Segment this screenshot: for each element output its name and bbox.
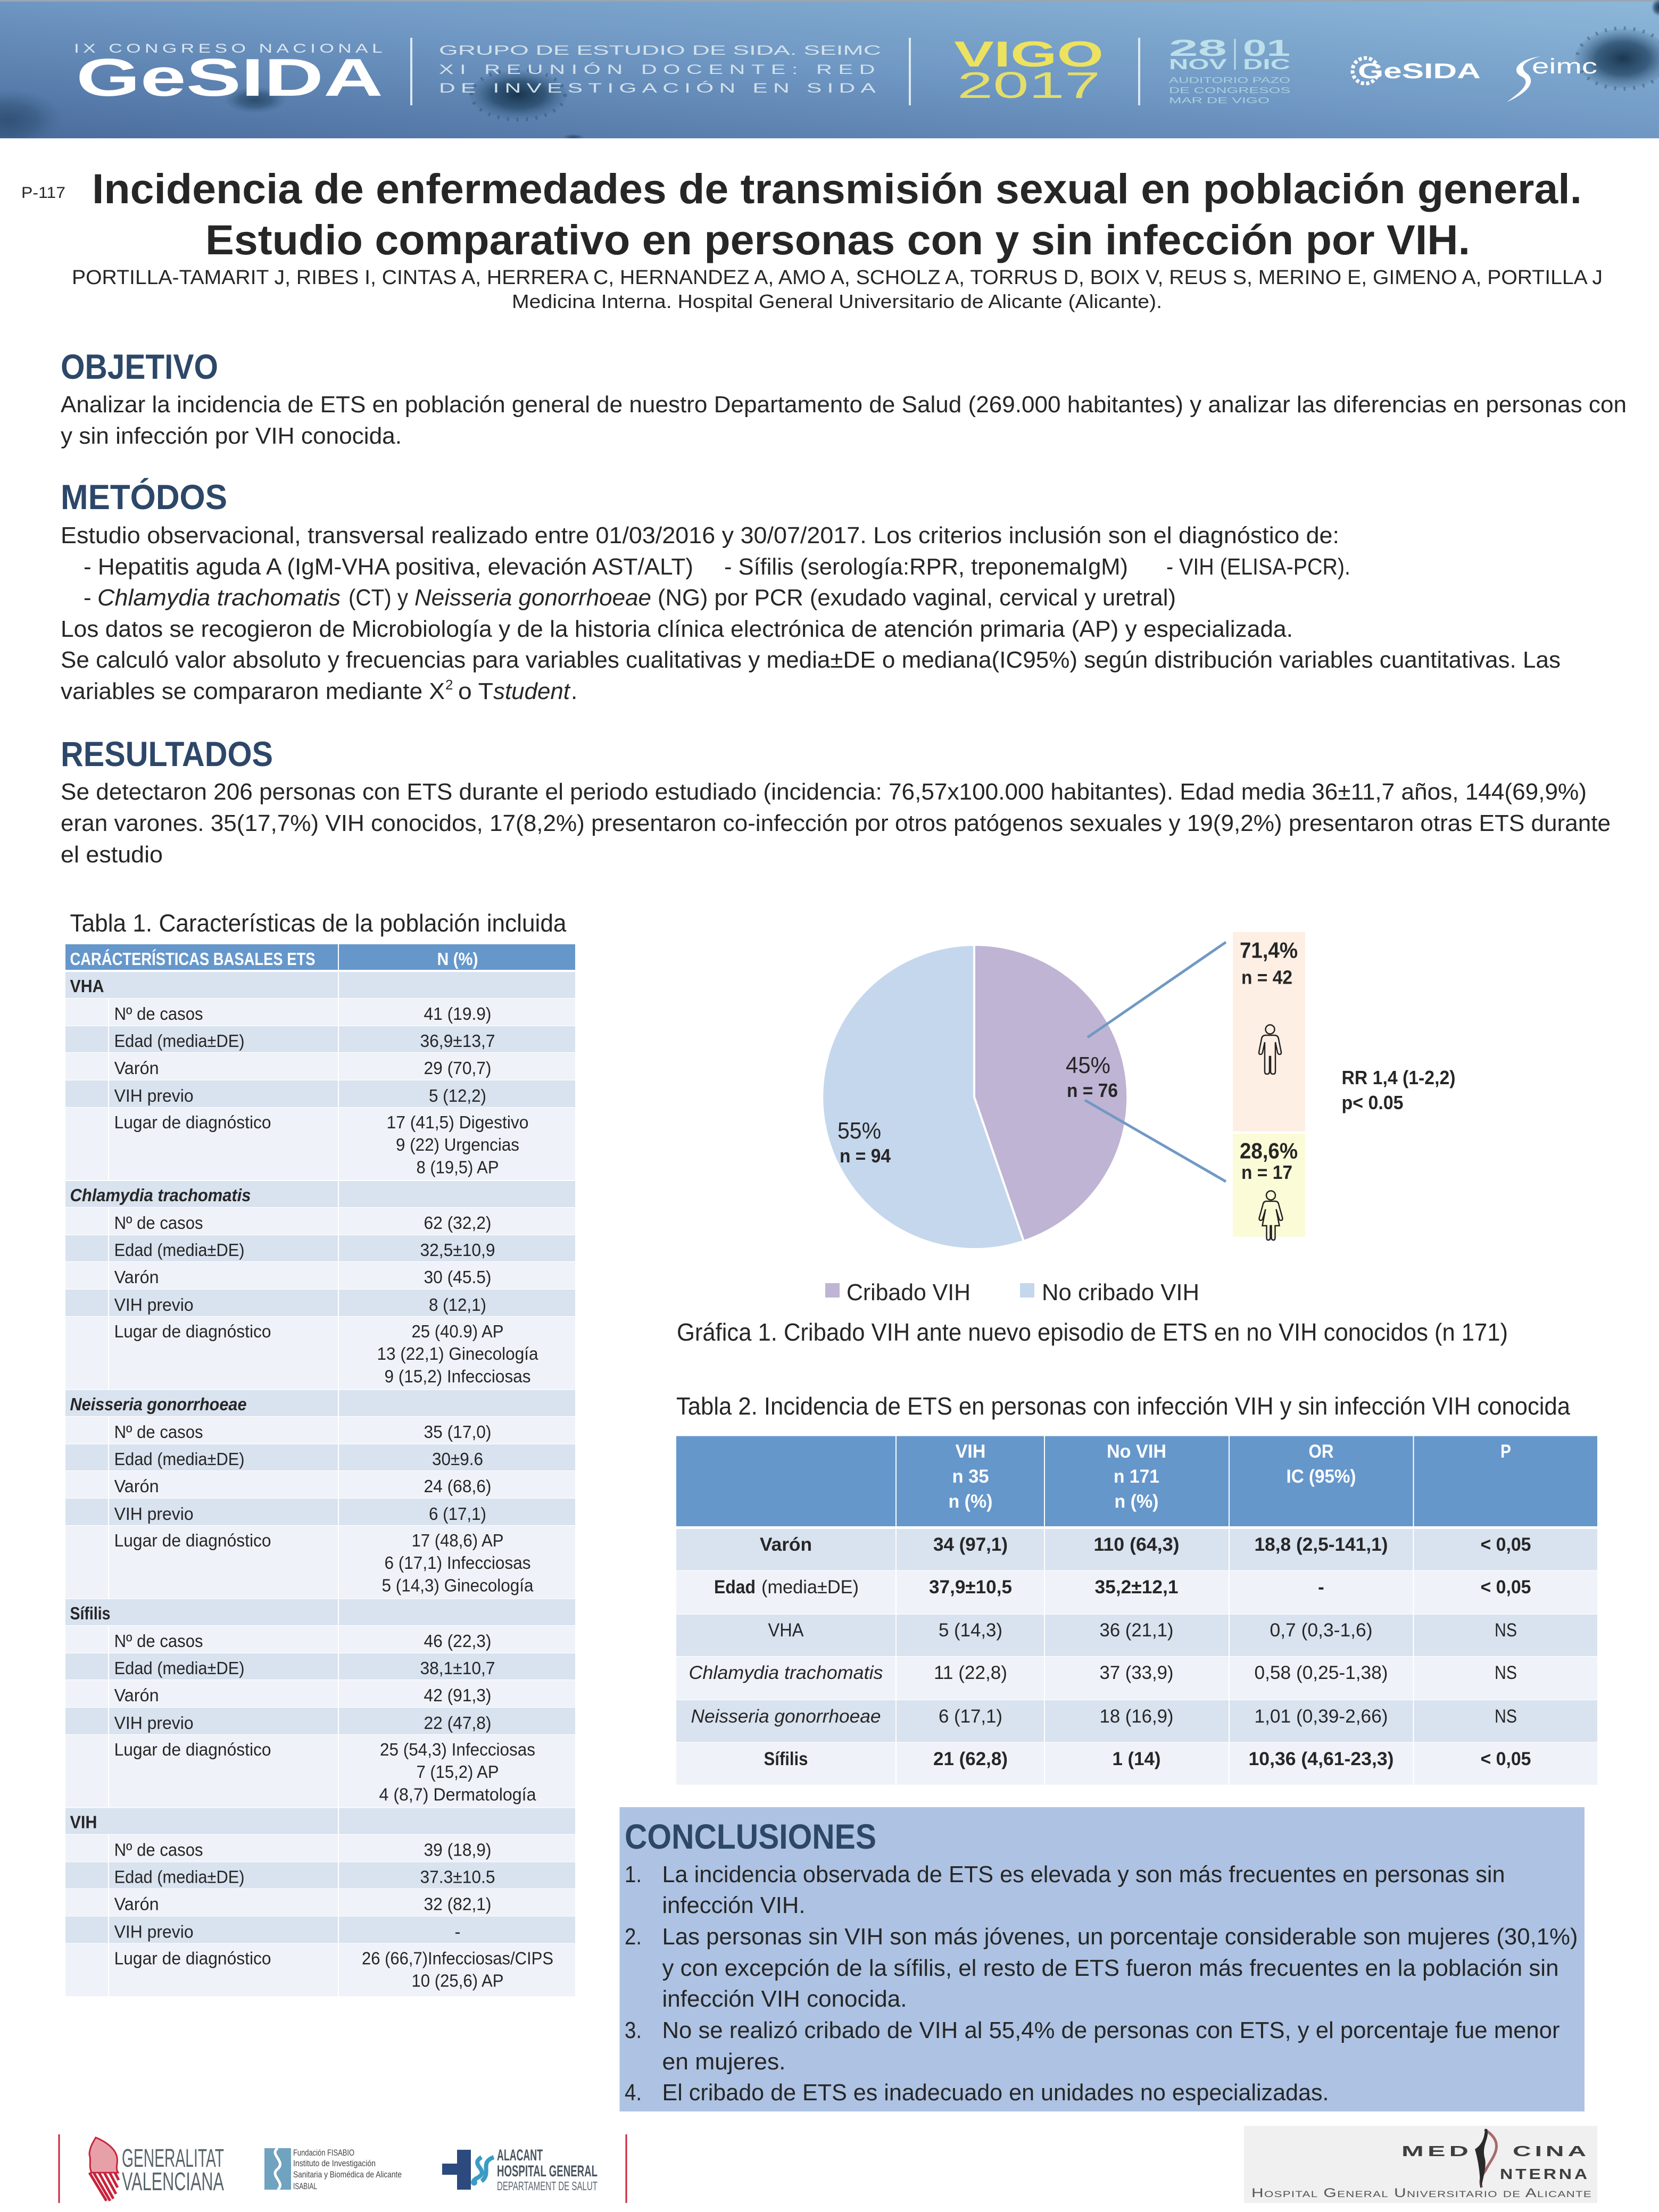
logo: Fundación FISABIO — [264, 2148, 402, 2191]
title: Estudio comparativo en personas con y sin infección por VIH. — [205, 216, 1470, 263]
conclusion 2: Las personas sin VIH son más jóvenes, un porcentaje considerable son mujeres (30,1%) — [662, 1924, 1578, 1950]
table 2 header: VIH — [956, 1441, 985, 1462]
table 1 group: Sífilis: VIH previo — [114, 1713, 194, 1733]
table 1 group: Neisseria gonorrhoeae: Nº de casos — [114, 1422, 203, 1442]
text: resultados — [61, 779, 1611, 868]
dates and venue: DIC — [1243, 56, 1290, 72]
conclusion 3 — [625, 2017, 1560, 2075]
table 1 group: Sífilis: 38,1±10,7 — [420, 1658, 495, 1678]
logo: Hospital General Alacant: DEPARTAMENT DE SALUT — [497, 2179, 598, 2193]
heading: métodos: METÓDOS — [61, 477, 227, 517]
table 2 row: Edad: (media±DE) — [761, 1577, 859, 1598]
table 1 group: VHA: 8 (19,5) AP — [416, 1158, 499, 1177]
dates and venue — [1169, 35, 1290, 105]
text: métodos: Estudio observacional, transversal realizado entre 01/03/2016 y 30/07/2017. Los criterios inclusión son el diagnóstico de: — [61, 522, 1339, 548]
table 1 group: Chlamydia trachomatis: 25 (40.9) AP — [412, 1321, 503, 1341]
panel: objetivo — [61, 347, 1627, 449]
conclusion 2: 2. — [625, 1924, 642, 1950]
table 1 group: VIH: 10 (25,6) AP — [412, 1970, 503, 1991]
table 1 group: VHA: Edad (media±DE) — [114, 1031, 245, 1051]
conclusion 1: infección VIH. — [662, 1892, 806, 1918]
logo: Hospital General Alacant: HOSPITAL GENERAL — [497, 2163, 598, 2180]
table 1 group: VIH: 39 (18,9) — [424, 1840, 492, 1860]
table 2 header — [676, 1436, 1597, 1526]
text: objetivo: y sin infección por VIH conocida. — [61, 423, 402, 449]
table 2 row: Sífilis — [676, 1743, 1597, 1785]
table 2 row: Edad: < 0,05 — [1480, 1577, 1531, 1598]
table 2 row: Sífilis: < 0,05 — [1480, 1749, 1531, 1769]
table 1 group: Neisseria gonorrhoeae: 24 (68,6) — [424, 1476, 492, 1496]
table 1 group: VHA: Varón — [114, 1058, 159, 1078]
table 1 group: VIH: 26 (66,7)Infecciosas/CIPS — [362, 1948, 553, 1968]
table 1 group: Chlamydia trachomatis: VIH previo — [114, 1295, 194, 1315]
table 2 row: VHA: 0,7 (0,3-1,6) — [1270, 1620, 1373, 1641]
table 1 group: Neisseria gonorrhoeae: 17 (48,6) AP — [412, 1531, 503, 1550]
table 1 group: Sífilis: 25 (54,3) Infecciosas — [380, 1740, 535, 1759]
conclusion 1: 1. — [625, 1861, 642, 1887]
conclusion 1: La incidencia observada de ETS es elevada y son más frecuentes en personas sin — [662, 1861, 1505, 1887]
location and year: VIGO — [954, 34, 1104, 74]
table 2 row: Sífilis: 21 (62,8) — [933, 1749, 1008, 1769]
table 2 row: Varón: 18,8 (2,5-141,1) — [1255, 1534, 1388, 1555]
table 2 row: VHA: VHA — [768, 1620, 804, 1641]
icon: woman — [1259, 1191, 1282, 1240]
table 1 group: VHA: 41 (19.9) — [424, 1004, 492, 1024]
conclusion 2: infección VIH conocida. — [662, 1986, 907, 2012]
logo: GeSIDA — [1353, 58, 1481, 84]
text: objetivo: Analizar la incidencia de ETS en población general de nuestro Departamento de Salud (269.000 habitantes) y analizar las diferencias en personas con — [61, 392, 1627, 418]
pie label: 45% — [1066, 1052, 1118, 1101]
logo: Medicina Interna: Hospital General Universitario de Alicante — [1251, 2186, 1592, 2200]
table 1 group: Chlamydia trachomatis — [65, 1181, 575, 1390]
pie label: 45%: n = 76 — [1067, 1079, 1118, 1101]
table 2 header: n (%) — [1114, 1491, 1159, 1512]
relative risk note: RR 1,4 (1-2,2) — [1342, 1067, 1456, 1088]
relative risk note: p< 0.05 — [1342, 1092, 1404, 1113]
logo: Fundación FISABIO: Sanitaria y Biomédica de Alicante — [293, 2169, 402, 2180]
text: métodos: Chlamydia trachomatis — [97, 585, 341, 611]
table 2 row: Neisseria: 1,01 (0,39-2,66) — [1255, 1706, 1388, 1727]
dates and venue: NOV — [1169, 56, 1227, 72]
logo: Medicina Interna: NTERNA — [1500, 2166, 1590, 2182]
table 1 group: VHA: 17 (41,5) Digestivo — [386, 1112, 529, 1132]
icon: man — [1259, 1025, 1281, 1074]
table 2 row: VHA: 5 (14,3) — [939, 1620, 1002, 1641]
text: métodos: 2 — [445, 677, 453, 693]
table 1 group: VHA: Nº de casos — [114, 1004, 203, 1024]
table 1 group: VHA: 9 (22) Urgencias — [396, 1135, 519, 1154]
arrow: to women — [1085, 1100, 1226, 1182]
table 2 row: Varón: 110 (64,3) — [1094, 1534, 1179, 1555]
table 2 row: Sífilis: 1 (14) — [1112, 1749, 1161, 1769]
heading: conclusiones: CONCLUSIONES — [625, 1817, 876, 1856]
table 1 group: VIH: Varón — [114, 1894, 159, 1914]
pie slice: no cribado — [822, 945, 1024, 1249]
pie label: 55%: 55% — [837, 1118, 881, 1144]
table 1 header row: CARÁCTERÍSTICAS BASALES ETS — [70, 949, 315, 969]
table 2 row: Sífilis: 10,36 (4,61-23,3) — [1248, 1749, 1394, 1769]
table 1 group: VIH: 37.3±10.5 — [420, 1867, 495, 1886]
stacked bar: men: n = 42 — [1241, 966, 1292, 988]
table 1 group: Chlamydia trachomatis: 62 (32,2) — [424, 1213, 492, 1233]
table 1 group: Sífilis: Edad (media±DE) — [114, 1658, 245, 1678]
panel: métodos — [61, 477, 1561, 704]
text: métodos: Se calculó valor absoluto y frecuencias para variables cualitativas y media±DE o mediana(IC95%) según distribución variables cuantitativas. Las — [61, 647, 1561, 673]
icon: virus particles — [0, 0, 1659, 149]
text: métodos: Neisseria gonorrhoeae — [414, 585, 651, 611]
conclusion 3: 3. — [625, 2017, 642, 2043]
logo: Generalitat Valenciana: GENERALITAT — [122, 2144, 224, 2173]
pie slice: cribado — [974, 945, 1127, 1241]
table 2 row: Neisseria: NS — [1495, 1706, 1517, 1727]
text: métodos: (NG) por PCR (exudado vaginal, cervical y uretral) — [658, 585, 1176, 611]
conclusion 3: en mujeres. — [662, 2049, 785, 2075]
stacked bar: men: 71,4% — [1240, 937, 1298, 963]
heading: tabla 1: Tabla 1. Características de la población incluida — [70, 909, 567, 937]
logo: Hospital General Alacant: ALACANT — [497, 2147, 543, 2164]
table 1 group: Chlamydia trachomatis: 32,5±10,9 — [420, 1240, 495, 1260]
table 2 row: Varón: 34 (97,1) — [933, 1534, 1008, 1555]
table 1 group: Sífilis — [65, 1599, 575, 1807]
table 2 row: VHA: 36 (21,1) — [1099, 1620, 1174, 1641]
table 1 group: VIH: Edad (media±DE) — [114, 1867, 245, 1886]
table 1 group: Neisseria gonorrhoeae — [65, 1390, 575, 1599]
chart caption: Gráfica 1. Cribado VIH ante nuevo episodio de ETS en no VIH conocidos (n 171) — [677, 1318, 1508, 1346]
table 2 row: Chlamydia: 11 (22,8) — [934, 1662, 1007, 1683]
table 1: baseline characteristics — [65, 944, 575, 1997]
table 1 group: VIH: - — [454, 1922, 461, 1942]
table 1 group: Chlamydia trachomatis: Lugar de diagnóstico — [114, 1321, 271, 1341]
text: objetivo — [61, 392, 1627, 449]
text: métodos: - Sífilis (serología:RPR, treponemaIgM) — [724, 554, 1128, 580]
table 1 header row: N (%) — [437, 949, 478, 969]
logo: Medicina Interna: MED — [1401, 2143, 1472, 2159]
table 1 group: Chlamydia trachomatis: Chlamydia trachomatis — [70, 1185, 251, 1205]
logo: GeSIDA: GeSIDA — [1358, 60, 1481, 83]
table 2 row: Varón: Varón — [760, 1534, 812, 1555]
table 1 group: VIH: VIH — [70, 1812, 97, 1832]
table 1 group: VIH: 32 (82,1) — [424, 1894, 492, 1914]
conclusion 4: 4. — [625, 2080, 642, 2106]
text: métodos: Los datos se recogieron de Microbiología y de la historia clínica electrónica de atención primaria (AP) y especializada. — [61, 616, 1293, 642]
dates and venue: AUDITORIO PAZO — [1169, 76, 1290, 85]
table 1 group: Neisseria gonorrhoeae: 30±9.6 — [432, 1449, 483, 1469]
poster code: P-117 — [21, 184, 65, 202]
meeting description — [439, 43, 881, 96]
conclusion 2 — [625, 1924, 1578, 2012]
table 2 row: Edad — [676, 1570, 1597, 1614]
legend — [825, 1279, 1199, 1305]
table 2 row: Sífilis: Sífilis — [764, 1749, 808, 1769]
table 2 row: Edad: - — [1318, 1577, 1324, 1598]
logo: Fundación FISABIO: Fundación FISABIO — [293, 2148, 354, 2158]
arrow: to men — [1088, 942, 1226, 1037]
panel: conclusiones — [619, 1807, 1585, 2111]
dates and venue: DE CONGRESOS — [1169, 86, 1290, 95]
dates and venue: 28 — [1169, 35, 1227, 61]
table 1 group: VIH — [65, 1808, 575, 1996]
text: métodos: student — [493, 678, 571, 704]
table 1 group: Chlamydia trachomatis: Edad (media±DE) — [114, 1240, 245, 1260]
heading: tabla 2: Tabla 2. Incidencia de ETS en personas con infección VIH y sin infección VIH conocida — [676, 1392, 1570, 1420]
table 1 group: Sífilis: Sífilis — [70, 1603, 111, 1623]
table 1 group: Sífilis: 22 (47,8) — [424, 1713, 492, 1733]
text: métodos: - VIH (ELISA-PCR). — [1166, 554, 1350, 580]
table 1 header row — [65, 944, 575, 970]
table 1 group: Chlamydia trachomatis: Varón — [114, 1267, 159, 1287]
meeting description: DE INVESTIGACIÓN EN SIDA — [439, 80, 881, 96]
text: métodos: - — [84, 585, 92, 611]
table 2 row: Neisseria: 6 (17,1) — [939, 1706, 1002, 1727]
stacked bar: women: n = 17 — [1241, 1161, 1292, 1183]
logo: Medicina Interna — [1244, 2126, 1597, 2203]
table 1 group: Chlamydia trachomatis: 13 (22,1) Ginecología — [377, 1344, 538, 1363]
table 2 header: n 35 — [952, 1466, 989, 1487]
table 1 group: VHA: VHA — [70, 976, 104, 996]
logo: Fundación FISABIO: ISABIAL — [293, 2181, 317, 2191]
logo: seimc — [1507, 55, 1597, 102]
legend: Cribado VIH — [847, 1279, 970, 1305]
text: resultados: eran varones. 35(17,7%) VIH conocidos, 17(8,2%) presentaron co-infección por otros patógenos sexuales y 19(9,2%) presentaron otras ETS durante — [61, 810, 1611, 836]
pie label: 55%: n = 94 — [840, 1145, 891, 1167]
table 1 group: VHA: Lugar de diagnóstico — [114, 1112, 271, 1132]
table 1 group: Sífilis: 42 (91,3) — [424, 1685, 492, 1705]
conclusion 3: No se realizó cribado de VIH al 55,4% de personas con ETS, y el porcentaje fue menor — [662, 2017, 1560, 2043]
table 1 group: Chlamydia trachomatis: 30 (45.5) — [424, 1267, 492, 1287]
logo: Generalitat Valenciana: VALENCIANA — [122, 2168, 224, 2196]
table 1 group: Neisseria gonorrhoeae: Neisseria gonorrhoeae — [70, 1394, 247, 1414]
footer sponsor logos — [59, 2134, 626, 2203]
table 2 header: IC (95%) — [1287, 1466, 1356, 1487]
table 2 row: Chlamydia: NS — [1495, 1662, 1517, 1683]
table 1 group: Sífilis: Nº de casos — [114, 1631, 203, 1651]
table 1 group: Neisseria gonorrhoeae: Edad (media±DE) — [114, 1449, 245, 1469]
meeting description: GRUPO DE ESTUDIO DE SIDA. SEIMC — [439, 43, 881, 58]
table 1 group: VIH: Lugar de diagnóstico — [114, 1948, 271, 1968]
table 1 group: VHA: 36,9±13,7 — [420, 1031, 495, 1051]
location and year — [954, 34, 1104, 106]
authors: PORTILLA-TAMARIT J, RIBES I, CINTAS A, HERRERA C, HERNANDEZ A, AMO A, SCHOLZ A, TORRUS D, BOIX V, REUS S, MERINO E, GIMENO A, PORTILLA J — [72, 267, 1603, 289]
table 1 group: Sífilis: 4 (8,7) Dermatología — [379, 1784, 536, 1804]
table 1 group: Chlamydia trachomatis: 8 (12,1) — [429, 1295, 486, 1315]
text: resultados: Se detectaron 206 personas con ETS durante el periodo estudiado (incidencia: 76,57x100.000 habitantes). Edad media 36±11,7 años, 144(69,9%) — [61, 779, 1587, 805]
table 2 row: Chlamydia: Chlamydia trachomatis — [689, 1662, 883, 1683]
table 2 row: Varón: < 0,05 — [1480, 1534, 1531, 1555]
meeting description: XI REUNIÓN DOCENTE: RED — [439, 62, 881, 77]
table 1 group: Neisseria gonorrhoeae: Lugar de diagnóstico — [114, 1531, 271, 1550]
dates and venue: 01 — [1243, 35, 1290, 61]
table 1 group: VHA: 5 (12,2) — [429, 1086, 486, 1105]
legend: No cribado VIH — [1042, 1279, 1199, 1305]
congress name — [74, 41, 386, 107]
stacked bar: men — [1233, 932, 1305, 1131]
affiliation: Medicina Interna. Hospital General Universitario de Alicante (Alicante). — [512, 290, 1162, 312]
text: métodos: variables se compararon mediante X — [61, 678, 445, 704]
text: métodos: (CT) y — [349, 585, 408, 611]
table 2 row: Chlamydia — [676, 1657, 1597, 1700]
logo: Generalitat Valenciana — [89, 2138, 224, 2201]
table 2 header: n 171 — [1114, 1466, 1159, 1487]
logo: Hospital General Alacant — [442, 2147, 598, 2193]
text: métodos: . — [571, 678, 577, 704]
conclusion 1 — [625, 1861, 1505, 1918]
table 1 group: Sífilis: 7 (15,2) AP — [416, 1762, 499, 1782]
table 1 group: Neisseria gonorrhoeae: Varón — [114, 1476, 159, 1496]
congress name: GeSIDA — [76, 48, 383, 107]
table 1 group: VHA: 29 (70,7) — [424, 1058, 492, 1078]
pie label: 45%: 45% — [1066, 1052, 1110, 1078]
conclusion 2: y con excepción de la sífilis, el resto de ETS fueron más frecuentes en la población sin — [662, 1955, 1559, 1981]
table 1 group: Chlamydia trachomatis: 9 (15,2) Infecciosas — [384, 1366, 531, 1386]
text: métodos: - Hepatitis aguda A (IgM-VHA positiva, elevación AST/ALT) — [84, 554, 693, 580]
table 1 group: VIH: VIH previo — [114, 1922, 194, 1942]
table 1 group: Sífilis: 46 (22,3) — [424, 1631, 492, 1651]
table 2 row: Neisseria: Neisseria gonorrhoeae — [691, 1706, 881, 1727]
table 1 group: VHA: VIH previo — [114, 1086, 194, 1105]
heading: objetivo: OBJETIVO — [61, 347, 218, 386]
logo: Medicina Interna: CINA — [1513, 2143, 1590, 2159]
conclusion 4: El cribado de ETS es inadecuado en unidades no especializadas. — [662, 2080, 1329, 2106]
table 1 group: Neisseria gonorrhoeae: 6 (17,1) — [429, 1504, 486, 1524]
chart: HIV screening pie — [822, 932, 1456, 1305]
location and year: 2017 — [957, 64, 1100, 106]
table 1 group: Neisseria gonorrhoeae: 35 (17,0) — [424, 1422, 492, 1442]
table 2 row: Chlamydia: 0,58 (0,25-1,38) — [1255, 1662, 1388, 1683]
stacked bar: women: 28,6% — [1240, 1138, 1298, 1163]
table 2 header: n (%) — [948, 1491, 993, 1512]
table 2 header: OR — [1309, 1441, 1333, 1462]
table 1 group: Chlamydia trachomatis: Nº de casos — [114, 1213, 203, 1233]
heading: resultados: RESULTADOS — [61, 734, 273, 774]
pie label: 55% — [837, 1118, 891, 1167]
table 1 group: Sífilis: Lugar de diagnóstico — [114, 1740, 271, 1759]
table 2 row: Varón — [676, 1529, 1597, 1570]
table 2 row: VHA: NS — [1495, 1620, 1517, 1641]
table 1 group: VIH: Nº de casos — [114, 1840, 203, 1860]
text: resultados: el estudio — [61, 842, 163, 868]
table 2 row: VHA — [676, 1615, 1597, 1656]
table 2 header: P — [1500, 1441, 1511, 1462]
text: métodos: o T — [458, 678, 493, 704]
panel: resultados — [61, 734, 1611, 868]
table 1 group: VHA — [65, 972, 575, 1180]
dates and venue: MAR DE VIGO — [1169, 96, 1270, 105]
table 2 row: Edad: 35,2±12,1 — [1095, 1577, 1178, 1598]
table 2 row: Edad: 37,9±10,5 — [929, 1577, 1012, 1598]
table 2 header: No VIH — [1107, 1441, 1166, 1462]
table 2 row: Neisseria — [676, 1700, 1597, 1742]
relative risk note — [1342, 1067, 1456, 1113]
table 1 group: Neisseria gonorrhoeae: 5 (14,3) Ginecología — [382, 1576, 534, 1595]
table 2 row: Chlamydia: 37 (33,9) — [1099, 1662, 1174, 1683]
table 2: incidence by HIV status — [676, 1436, 1597, 1785]
title — [92, 165, 1582, 263]
text: métodos — [61, 522, 1561, 704]
logo: seimc: eimc — [1532, 55, 1597, 78]
table 1 group: Neisseria gonorrhoeae: 6 (17,1) Infecciosas — [384, 1553, 531, 1573]
header banner — [0, 0, 1659, 149]
table 2 row: Edad: Edad — [714, 1577, 756, 1598]
logo: Fundación FISABIO: Instituto de Investigación — [293, 2158, 376, 2168]
title: Incidencia de enfermedades de transmisión sexual en población general. — [92, 165, 1582, 212]
table 2 row: Neisseria: 18 (16,9) — [1099, 1706, 1174, 1727]
table 1 group: Neisseria gonorrhoeae: VIH previo — [114, 1504, 194, 1524]
table 1 group: Sífilis: Varón — [114, 1685, 159, 1705]
congress name: IX CONGRESO NACIONAL — [74, 41, 386, 56]
stacked bar: women — [1233, 1134, 1305, 1240]
